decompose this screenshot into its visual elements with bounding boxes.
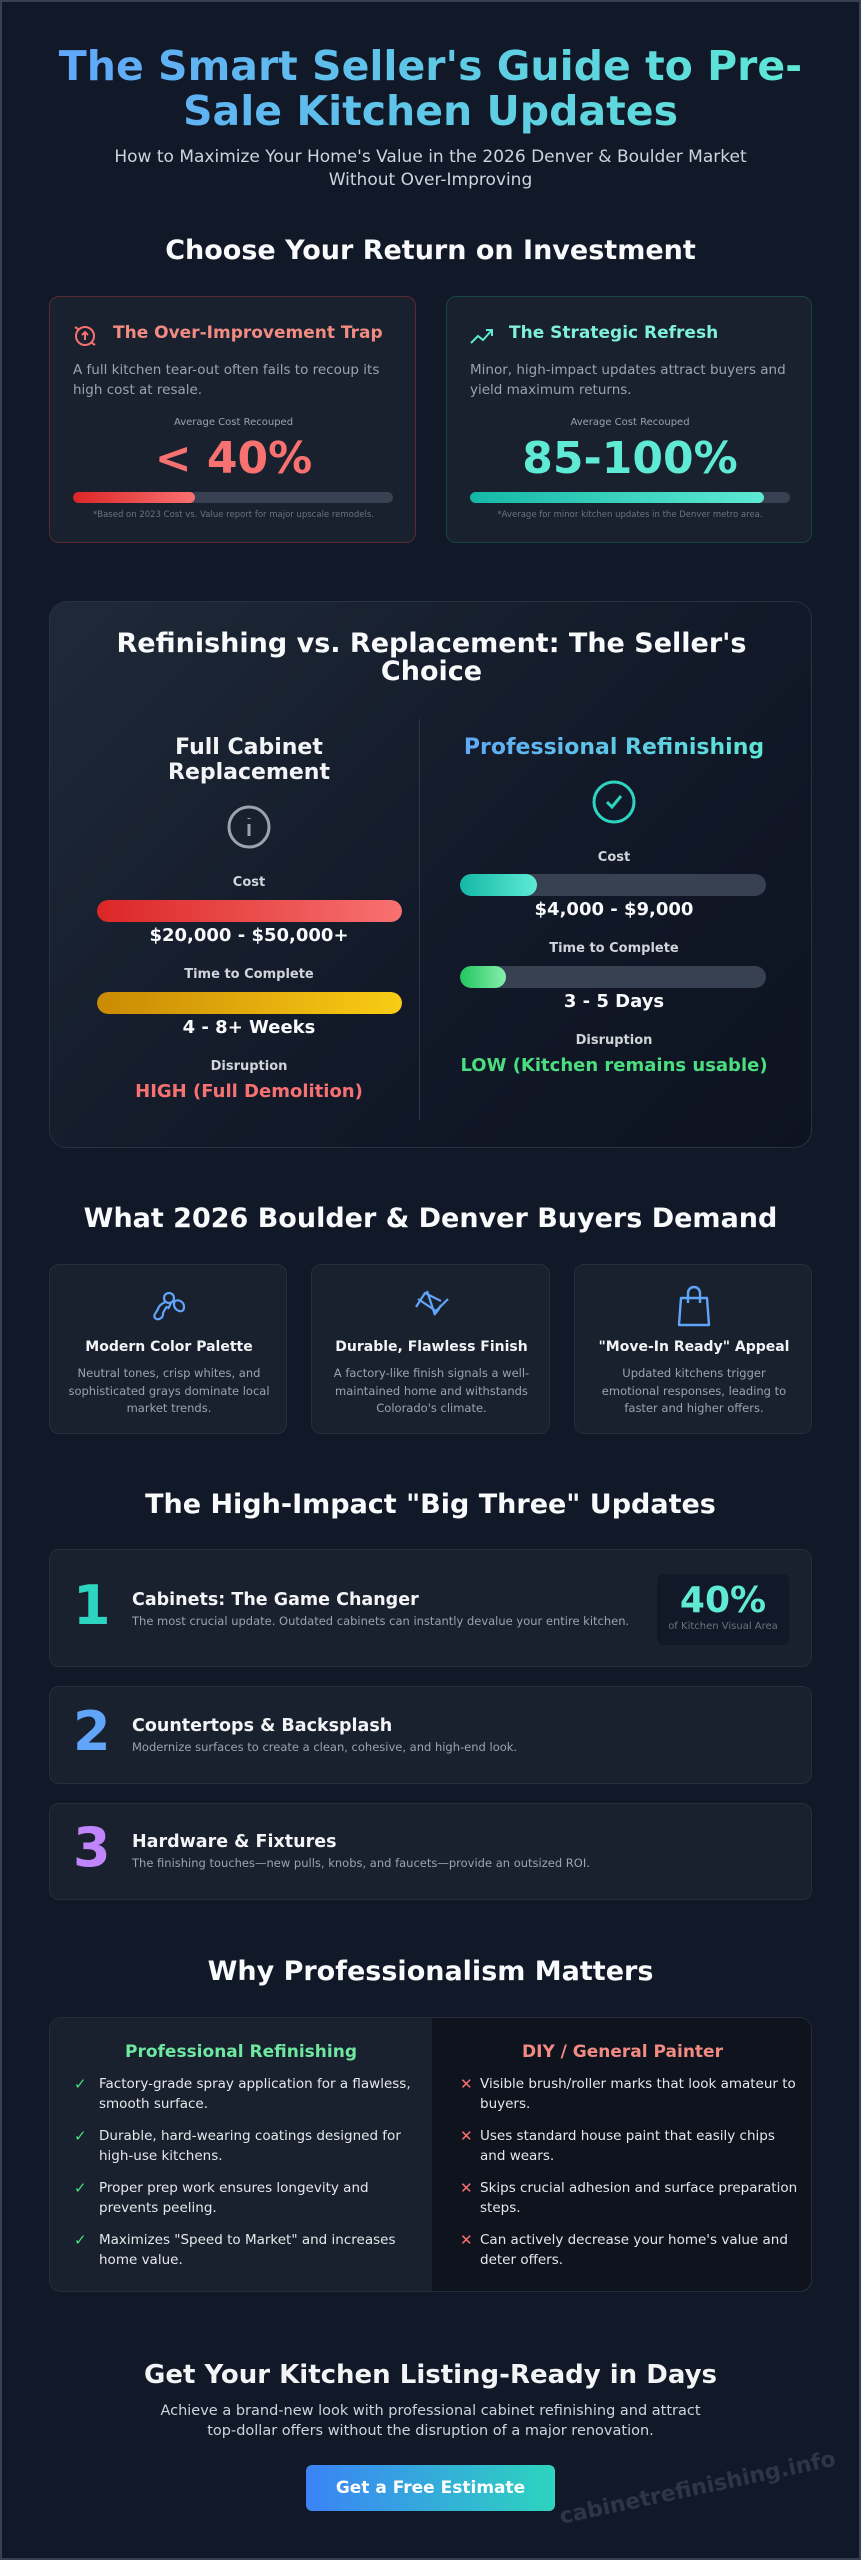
- heading: buyers demand: What 2026 Boulder & Denver Buyers Demand: [84, 1203, 777, 1234]
- panel: refinishing vs replacement: [49, 601, 812, 1148]
- column: full replacement: HIGH (Full Demolition): [135, 1081, 363, 1102]
- stat: 40%: of Kitchen Visual Area: [668, 1621, 778, 1632]
- column: professional: Professional Refinishing: [125, 2042, 357, 2062]
- heading: ROI: Choose Your Return on Investment: [165, 235, 696, 266]
- icon: shopping bag: [678, 1286, 710, 1326]
- column: full replacement: $20,000 - $50,000+: [149, 925, 349, 946]
- description: A full kitchen tear-out often fails to recoup its high cost at resale.: [73, 362, 379, 398]
- item 2: 2: [73, 1700, 111, 1763]
- CTA text: Achieve a brand-new look with professional cabinet refinishing and attract top-dollar offers without the disruption of a major renovation.: [160, 2403, 701, 2439]
- column: professional: [50, 2018, 432, 2293]
- column: professional refinishing: Time to Complete: [549, 941, 679, 956]
- card: durable finish: [311, 1264, 550, 1434]
- panel: strategic refresh: [446, 296, 812, 543]
- column: professional: Factory-grade spray application for a flawless, smooth surface.: [99, 2076, 411, 2112]
- heading: big three: The High-Impact "Big Three" Updates: [145, 1489, 716, 1520]
- column: DIY: ✕: [460, 2075, 473, 2093]
- column: professional: Durable, hard-wearing coatings designed for high-use kitchens.: [99, 2128, 401, 2164]
- column: professional: ✓: [74, 2231, 87, 2249]
- icon: trend up: [470, 329, 493, 344]
- column: professional refinishing: 3 - 5 Days: [564, 991, 664, 1012]
- panel: over-improvement trap: *Based on 2023 Cost vs. Value report for major upscale remodels.: [93, 510, 374, 520]
- CTA heading: Get Your Kitchen Listing-Ready in Days: [144, 2360, 717, 2390]
- panel: over-improvement trap: [49, 296, 416, 543]
- card: modern color palette: Neutral tones, crisp whites, and sophisticated grays dominate local market trends.: [68, 1366, 270, 1415]
- icon: info: [228, 806, 270, 848]
- item 3: The finishing touches—new pulls, knobs, and faucets—provide an outsized ROI.: [132, 1856, 590, 1870]
- column: professional refinishing: [460, 735, 768, 1076]
- column: DIY: Visible brush/roller marks that look amateur to buyers.: [480, 2076, 796, 2112]
- card heading: The Strategic Refresh: [509, 323, 718, 343]
- comparison panel: [49, 2017, 812, 2292]
- column: professional refinishing: Professional Refinishing: [464, 735, 764, 760]
- column: DIY: Uses standard house paint that easily chips and wears.: [480, 2128, 775, 2164]
- column: professional: ✓: [74, 2075, 87, 2093]
- panel: over-improvement trap: < 40%: [155, 433, 312, 484]
- column: professional: ✓: [74, 2127, 87, 2145]
- item 3: [49, 1803, 812, 1900]
- card: move-in ready: Updated kitchens trigger emotional responses, leading to faster and higher offers.: [602, 1366, 786, 1415]
- bar: [73, 492, 393, 503]
- item 3: 3: [73, 1816, 111, 1879]
- column: professional refinishing: Disruption: [576, 1033, 652, 1048]
- column: DIY: ✕: [460, 2179, 473, 2197]
- column: full replacement: Cost: [233, 875, 265, 890]
- stat: Average Cost Recouped: [570, 417, 690, 428]
- column: professional: Proper prep work ensures longevity and prevents peeling.: [99, 2180, 369, 2216]
- column: full replacement: Time to Complete: [184, 967, 314, 982]
- description: Minor, high-impact updates attract buyers and yield maximum returns.: [470, 362, 786, 398]
- panel: strategic refresh: *Average for minor kitchen updates in the Denver metro area.: [497, 510, 763, 520]
- column: DIY: DIY / General Painter: [522, 2042, 723, 2062]
- card: durable finish: A factory-like finish signals a well-maintained home and withstands Colorado's climate.: [334, 1366, 529, 1415]
- card: modern color palette: Modern Color Palette: [85, 1339, 253, 1355]
- CTA button: Get a Free Estimate: [336, 2478, 525, 2498]
- card: durable finish: Durable, Flawless Finish: [335, 1339, 528, 1355]
- column: DIY: ✕: [460, 2231, 473, 2249]
- item 3: Hardware & Fixtures: [132, 1832, 337, 1852]
- heading: professionalism: Why Professionalism Matters: [208, 1956, 653, 1987]
- column: professional refinishing: LOW (Kitchen remains usable): [460, 1055, 768, 1076]
- icon: check: [592, 780, 636, 824]
- column: full replacement: [97, 735, 402, 1102]
- card: move-in ready: [574, 1264, 812, 1434]
- column: professional: Maximizes "Speed to Market" and increases home value.: [99, 2232, 395, 2268]
- column: DIY: Can actively decrease your home's value and deter offers.: [480, 2232, 788, 2268]
- icon: palette: [153, 1292, 186, 1320]
- column: DIY: Skips crucial adhesion and surface preparation steps.: [480, 2180, 797, 2216]
- column: professional refinishing: $4,000 - $9,000: [535, 899, 693, 920]
- stat: 40%: [657, 1574, 789, 1645]
- item 1: [49, 1549, 812, 1667]
- column: full replacement: 4 - 8+ Weeks: [183, 1017, 315, 1038]
- icon: brush: [415, 1290, 449, 1316]
- item 2: [49, 1686, 812, 1784]
- item 1: 1: [73, 1574, 111, 1637]
- item 2: Modernize surfaces to create a clean, cohesive, and high-end look.: [132, 1740, 517, 1754]
- column: full replacement: Disruption: [211, 1059, 287, 1074]
- watermark: cabinetrefinishing.info: [557, 2447, 838, 2530]
- card heading: The Over-Improvement Trap: [113, 323, 383, 343]
- column: professional: ✓: [74, 2179, 87, 2197]
- CTA button: [306, 2465, 555, 2511]
- heading: Refinishing vs. Replacement: The Seller's Choice: [116, 628, 746, 687]
- column: DIY: ✕: [460, 2127, 473, 2145]
- item 2: Countertops & Backsplash: [132, 1716, 392, 1736]
- stat: 40%: 40%: [680, 1580, 766, 1621]
- subtitle: How to Maximize Your Home's Value in the 2026 Denver & Boulder Market Without Over-Improving: [114, 147, 747, 190]
- bar: [470, 492, 790, 503]
- stat: Average Cost Recouped: [174, 417, 293, 428]
- item 1: Cabinets: The Game Changer: [132, 1590, 419, 1610]
- card: modern color palette: [49, 1264, 287, 1434]
- column: professional refinishing: Cost: [598, 850, 630, 865]
- icon: alert clock: [74, 326, 96, 346]
- title: The Smart Seller's Guide to Pre-Sale Kitchen Updates: [59, 42, 802, 135]
- card: move-in ready: "Move-In Ready" Appeal: [598, 1339, 789, 1355]
- column: full replacement: Replacement: [168, 760, 330, 785]
- item 1: The most crucial update. Outdated cabinets can instantly devalue your entire kitchen.: [132, 1614, 629, 1628]
- column: DIY: [460, 2042, 797, 2268]
- panel: strategic refresh: 85-100%: [522, 433, 738, 484]
- column: full replacement: Full Cabinet: [175, 735, 323, 760]
